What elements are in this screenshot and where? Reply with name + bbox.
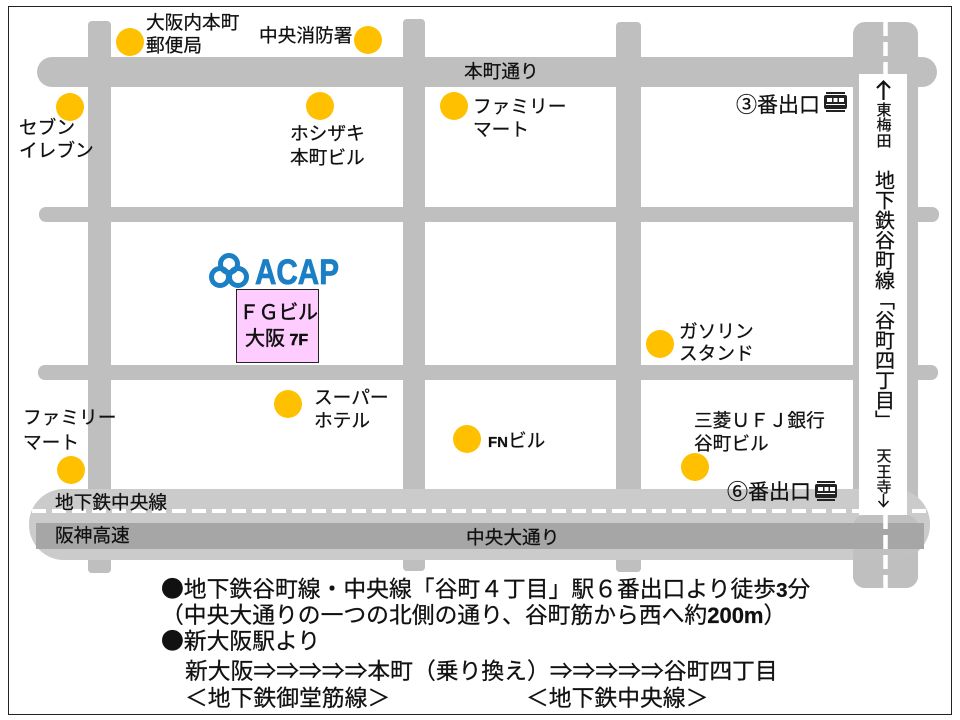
landmark labels: ホシザキ [290,119,365,146]
icon: train [824,92,847,112]
landmark labels: マート [23,428,79,455]
directions text: ●地下鉄谷町線・中央線「谷町４丁目」駅６番出口より徒歩3分 [161,571,810,604]
landmark labels: 大阪内本町 [146,8,240,35]
landmark labels: 中央消防署 [259,21,352,48]
landmark labels: ファミリー [23,403,116,430]
north arrow: Higashi-Umeda [876,82,892,151]
road names: 阪神高速 [55,521,130,548]
landmark labels: 三菱ＵＦＪ銀行 [694,406,825,433]
north arrow: Higashi-Umeda: 東 [876,99,892,120]
directions text: ●新大阪駅より [161,623,320,656]
logo wordmark: ACAP [255,253,339,292]
road names: 中央大通り [466,523,559,550]
landmark labels: マート [473,115,529,142]
road names: 地下鉄中央線 [55,488,167,515]
building box: FG Building Osaka 7F: 大阪 7F [245,322,308,351]
south arrow: Tennoji: 寺 [876,476,892,497]
subway line name [870,170,900,430]
ACAP logo [212,253,339,292]
landmark labels: ファミリー [473,92,566,119]
directions text: ＜地下鉄中央線＞ [526,680,708,713]
icon: train [815,481,837,501]
directions text: （中央大通りの一つの北側の通り、谷町筋から西へ約200m） [161,597,786,630]
south arrow: Tennoji [876,445,892,506]
directions text: 新大阪⇒⇒⇒⇒⇒本町（乗り換え）⇒⇒⇒⇒⇒谷町四丁目 [185,653,778,686]
north arrow: Higashi-Umeda: 梅 [876,114,892,135]
subway line name: 「谷町四丁目」 [870,290,900,430]
directions text: ＜地下鉄御堂筋線＞ [185,680,390,713]
landmark labels: イレブン [19,136,94,163]
subway line name: 地下鉄谷町線 [870,170,900,290]
road network [29,19,939,588]
logo mark [212,256,246,286]
landmark labels: スーパー [314,383,389,410]
landmark labels: 谷町ビル [694,429,769,456]
road names: 本町通り [464,57,539,84]
landmark labels: 本町ビル [290,143,365,170]
landmark labels: 郵便局 [146,31,202,58]
landmark dots [56,26,709,484]
south arrow: Tennoji: 王 [876,461,892,482]
landmark labels: FNビル [488,426,545,453]
road names [55,57,559,550]
landmark labels [19,8,825,456]
building box: FG Building Osaka 7F [236,290,318,362]
landmark labels: セブン [19,113,75,140]
south arrow: Tennoji: 天 [876,445,892,466]
landmark labels: ホテル [314,406,370,433]
north arrow: Higashi-Umeda: 田 [876,130,892,151]
exit 3 label: ③番出口 [736,89,820,119]
building box: FG Building Osaka 7F: ＦＧビル [239,296,318,325]
exit 6 label: ⑥番出口 [727,476,811,506]
directions text [161,571,810,713]
landmark labels: ガソリン [679,317,754,344]
landmark labels: スタンド [679,339,754,366]
